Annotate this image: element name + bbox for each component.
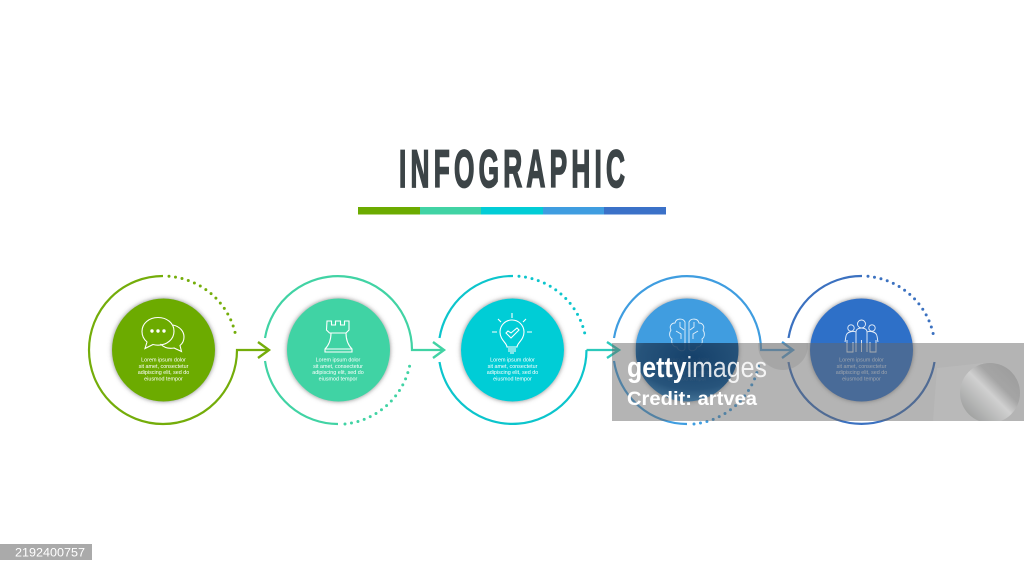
icon: speech bubbles <box>142 318 184 352</box>
watermark band <box>612 343 1024 421</box>
image id badge: 2192400757 <box>15 546 85 560</box>
watermark credit: Credit: artvea <box>627 388 757 410</box>
inner disc <box>636 298 738 402</box>
body text: adipiscing elit, sed do <box>836 370 887 376</box>
watermark logo: gettyimages <box>627 352 767 384</box>
body text: eiusmod tempor <box>668 376 707 382</box>
body text: Lorem ipsum dolor <box>490 358 535 364</box>
body text: sit amet, consectetur <box>313 364 363 370</box>
body text: Lorem ipsum dolor <box>141 358 186 364</box>
body text: adipiscing elit, sed do <box>312 370 364 376</box>
body text: sit amet, consectetur <box>662 364 712 370</box>
icon: group of people <box>845 320 878 352</box>
body text: eiusmod tempor <box>319 376 358 382</box>
inner disc <box>287 298 390 402</box>
step 2: teal circle <box>265 276 444 424</box>
outer ring <box>788 276 934 424</box>
icon: brain <box>670 319 704 351</box>
colour bar under title <box>358 207 666 214</box>
body text: sit amet, consectetur <box>139 364 189 370</box>
arrow: step 3 to step 4 <box>607 342 619 358</box>
body text: sit amet, consectetur <box>837 364 887 370</box>
inner disc <box>112 298 215 402</box>
step 3: cyan circle <box>440 276 618 424</box>
body text: adipiscing elit, sed do <box>138 370 189 376</box>
body text: adipiscing elit, sed do <box>487 370 538 376</box>
body text: Lorem ipsum dolor <box>316 358 361 364</box>
body text: eiusmod tempor <box>842 376 881 382</box>
step 4: blue circle <box>614 276 792 424</box>
outer ring and arrow <box>440 276 618 424</box>
body text: Lorem ipsum dolor <box>839 358 884 364</box>
body text: eiusmod tempor <box>144 376 183 382</box>
step 1: green circle <box>89 276 269 424</box>
arrow: step 4 to step 5 <box>782 342 793 358</box>
body text: adipiscing elit, sed do <box>661 370 713 376</box>
body text: sit amet, consectetur <box>488 364 538 370</box>
step 5: dark blue circle <box>788 276 934 424</box>
body text: eiusmod tempor <box>493 376 532 382</box>
icon: light bulb with check <box>492 313 532 353</box>
body text: Lorem ipsum dolor <box>665 358 710 364</box>
icon: chess rook <box>325 321 352 352</box>
outer ring and arrow <box>265 276 444 424</box>
inner disc <box>810 298 913 402</box>
inner disc <box>461 298 564 402</box>
title: INFOGRAPHIC <box>399 139 625 198</box>
image id badge <box>0 544 92 560</box>
outer ring and arrow <box>614 276 792 424</box>
outer ring and arrow <box>89 276 269 424</box>
